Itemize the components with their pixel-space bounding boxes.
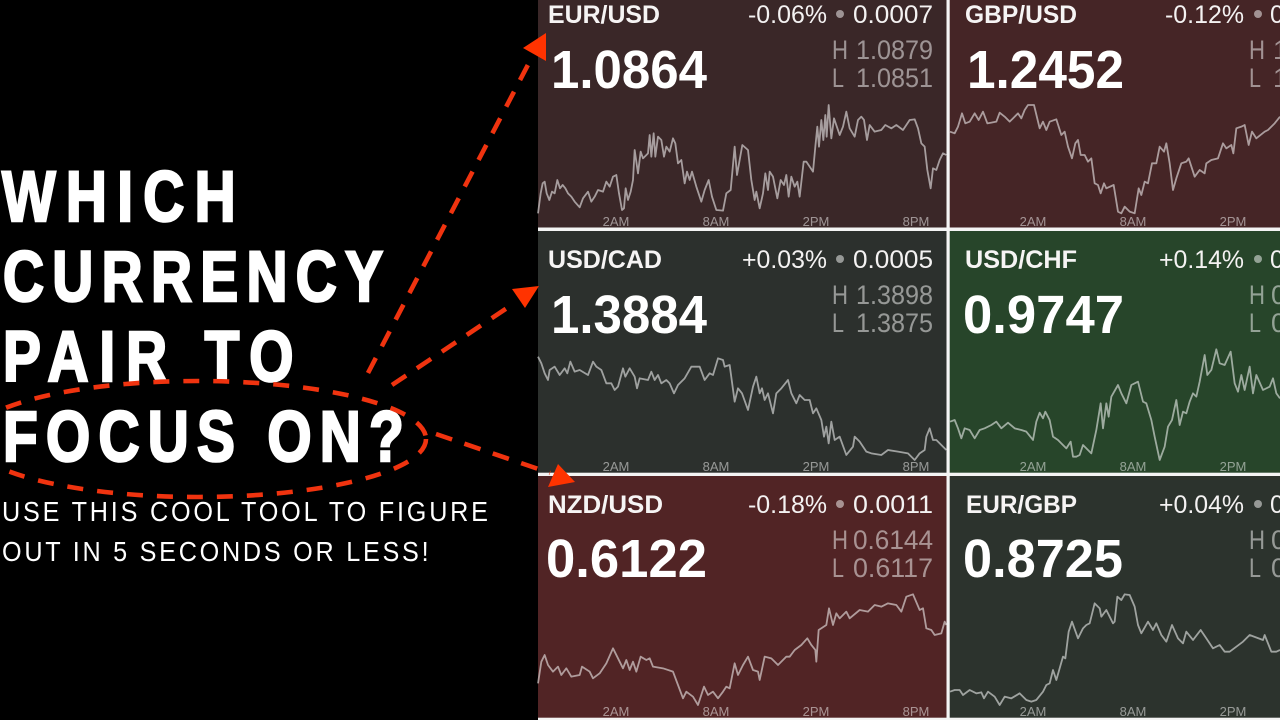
EUR/USD time axis: 8AM: [703, 214, 729, 229]
title: PAIR TO: [3, 317, 293, 396]
USD/CHF time axis: 2PM: [1220, 459, 1246, 474]
USD/CHF change: +0.14%: [1159, 246, 1244, 274]
USD/CAD change: [742, 246, 933, 274]
USD/CHF time axis: 8AM: [1120, 459, 1146, 474]
NZD/USD change: 0.0011: [853, 491, 933, 519]
EUR/GBP high low: [1249, 525, 1280, 583]
USD/CAD time axis: 8PM: [903, 459, 929, 474]
panel: EUR/USD: [538, 0, 946, 229]
panel: EUR/GBP: [950, 476, 1280, 719]
panel: GBP/USD: [950, 0, 1280, 229]
GBP/USD change: -0.12%: [1165, 1, 1244, 29]
NZD/USD high low: 0.6144: [853, 525, 933, 555]
NZD/USD change: -0.18%: [748, 491, 827, 519]
NZD/USD high low: [832, 525, 933, 583]
EUR/GBP price: 0.8725: [963, 529, 1123, 589]
EUR/USD time axis: 2PM: [803, 214, 829, 229]
EUR/GBP pair label: EUR/GBP: [966, 491, 1077, 519]
USD/CAD time axis: 8AM: [703, 459, 729, 474]
panel: USD/CHF: [950, 231, 1280, 474]
EUR/USD high low: 1.0879: [856, 35, 933, 65]
EUR/GBP change: +0.04%: [1159, 491, 1244, 519]
EUR/USD high low: H: [832, 35, 848, 65]
USD/CHF price: 0.9747: [963, 285, 1124, 345]
USD/CHF time axis: [1020, 459, 1246, 474]
subtitle: USE THIS COOL TOOL TO FIGURE: [2, 496, 488, 527]
EUR/USD price: 1.0864: [551, 40, 707, 100]
panel: USD/CAD: [538, 231, 946, 474]
subtitle: OUT IN 5 SECONDS OR LESS!: [2, 536, 429, 567]
GBP/USD time axis: 2AM: [1020, 214, 1046, 229]
USD/CAD high low: H: [832, 280, 848, 310]
EUR/GBP time axis: [1020, 704, 1246, 719]
NZD/USD high low: H: [832, 525, 848, 555]
GBP/USD high low: H: [1249, 35, 1265, 65]
arrow to USD/CAD: [392, 286, 539, 385]
EUR/GBP high low: L: [1249, 553, 1261, 583]
EUR/GBP line chart: [950, 594, 1280, 705]
EUR/USD time axis: 2AM: [603, 214, 629, 229]
NZD/USD time axis: 2PM: [803, 704, 829, 719]
arrow to NZD/USD: [436, 434, 575, 487]
USD/CHF high low: H: [1249, 280, 1265, 310]
NZD/USD change: [748, 491, 933, 519]
NZD/USD time axis: 8AM: [703, 704, 729, 719]
USD/CAD time axis: 2PM: [803, 459, 829, 474]
EUR/USD change: 0.0007: [853, 1, 933, 29]
USD/CAD time axis: 2AM: [603, 459, 629, 474]
NZD/USD high low: L: [832, 553, 844, 583]
EUR/GBP time axis: 2PM: [1220, 704, 1246, 719]
title: FOCUS ON?: [3, 397, 404, 476]
arrow to EUR/USD: [368, 33, 546, 373]
EUR/USD pair label: EUR/USD: [548, 1, 660, 29]
USD/CAD line chart: [538, 357, 946, 460]
NZD/USD pair label: NZD/USD: [548, 491, 663, 519]
EUR/USD change: -0.06%: [748, 1, 827, 29]
NZD/USD time axis: 2AM: [603, 704, 629, 719]
USD/CAD pair label: USD/CAD: [548, 246, 662, 274]
USD/CHF high low: L: [1249, 308, 1261, 338]
USD/CAD high low: 1.3875: [856, 308, 933, 338]
GBP/USD time axis: 2PM: [1220, 214, 1246, 229]
GBP/USD pair label: GBP/USD: [965, 1, 1077, 29]
GBP/USD change: [1165, 1, 1280, 29]
USD/CHF time axis: 2AM: [1020, 459, 1046, 474]
EUR/USD time axis: 8PM: [903, 214, 929, 229]
NZD/USD time axis: 8PM: [903, 704, 929, 719]
EUR/GBP time axis: 8AM: [1120, 704, 1146, 719]
USD/CAD time axis: [603, 459, 929, 474]
NZD/USD line chart: [538, 594, 946, 705]
NZD/USD high low: 0.6117: [853, 553, 933, 583]
title: WHICH: [2, 157, 236, 236]
GBP/USD line chart: [950, 105, 1280, 213]
EUR/USD line chart: [538, 105, 946, 213]
subtitle: [2, 496, 488, 567]
GBP/USD high low: L: [1249, 63, 1261, 93]
NZD/USD price: 0.6122: [546, 529, 707, 589]
USD/CAD high low: [832, 280, 933, 338]
EUR/USD high low: 1.0851: [856, 63, 933, 93]
USD/CHF line chart: [950, 349, 1280, 460]
EUR/USD time axis: [603, 214, 929, 229]
USD/CAD price: 1.3884: [551, 285, 707, 345]
USD/CAD high low: 1.3898: [856, 280, 933, 310]
GBP/USD time axis: [1020, 214, 1246, 229]
title: [2, 157, 404, 476]
EUR/USD high low: [832, 35, 933, 93]
USD/CHF pair label: USD/CHF: [965, 246, 1077, 274]
dashed ellipse around heading line: [0, 381, 426, 497]
panel: NZD/USD: [538, 476, 946, 719]
USD/CHF high low: [1249, 280, 1280, 338]
GBP/USD price: 1.2452: [967, 40, 1124, 100]
USD/CAD change: +0.03%: [742, 246, 827, 274]
EUR/USD change: [748, 1, 933, 29]
EUR/GBP time axis: 2AM: [1020, 704, 1046, 719]
EUR/GBP high low: H: [1249, 525, 1265, 555]
USD/CAD high low: L: [832, 308, 844, 338]
NZD/USD time axis: [603, 704, 929, 719]
GBP/USD time axis: 8AM: [1120, 214, 1146, 229]
GBP/USD high low: [1249, 35, 1280, 93]
USD/CAD change: 0.0005: [853, 246, 933, 274]
EUR/USD high low: L: [832, 63, 844, 93]
title: CURRENCY: [3, 237, 383, 316]
